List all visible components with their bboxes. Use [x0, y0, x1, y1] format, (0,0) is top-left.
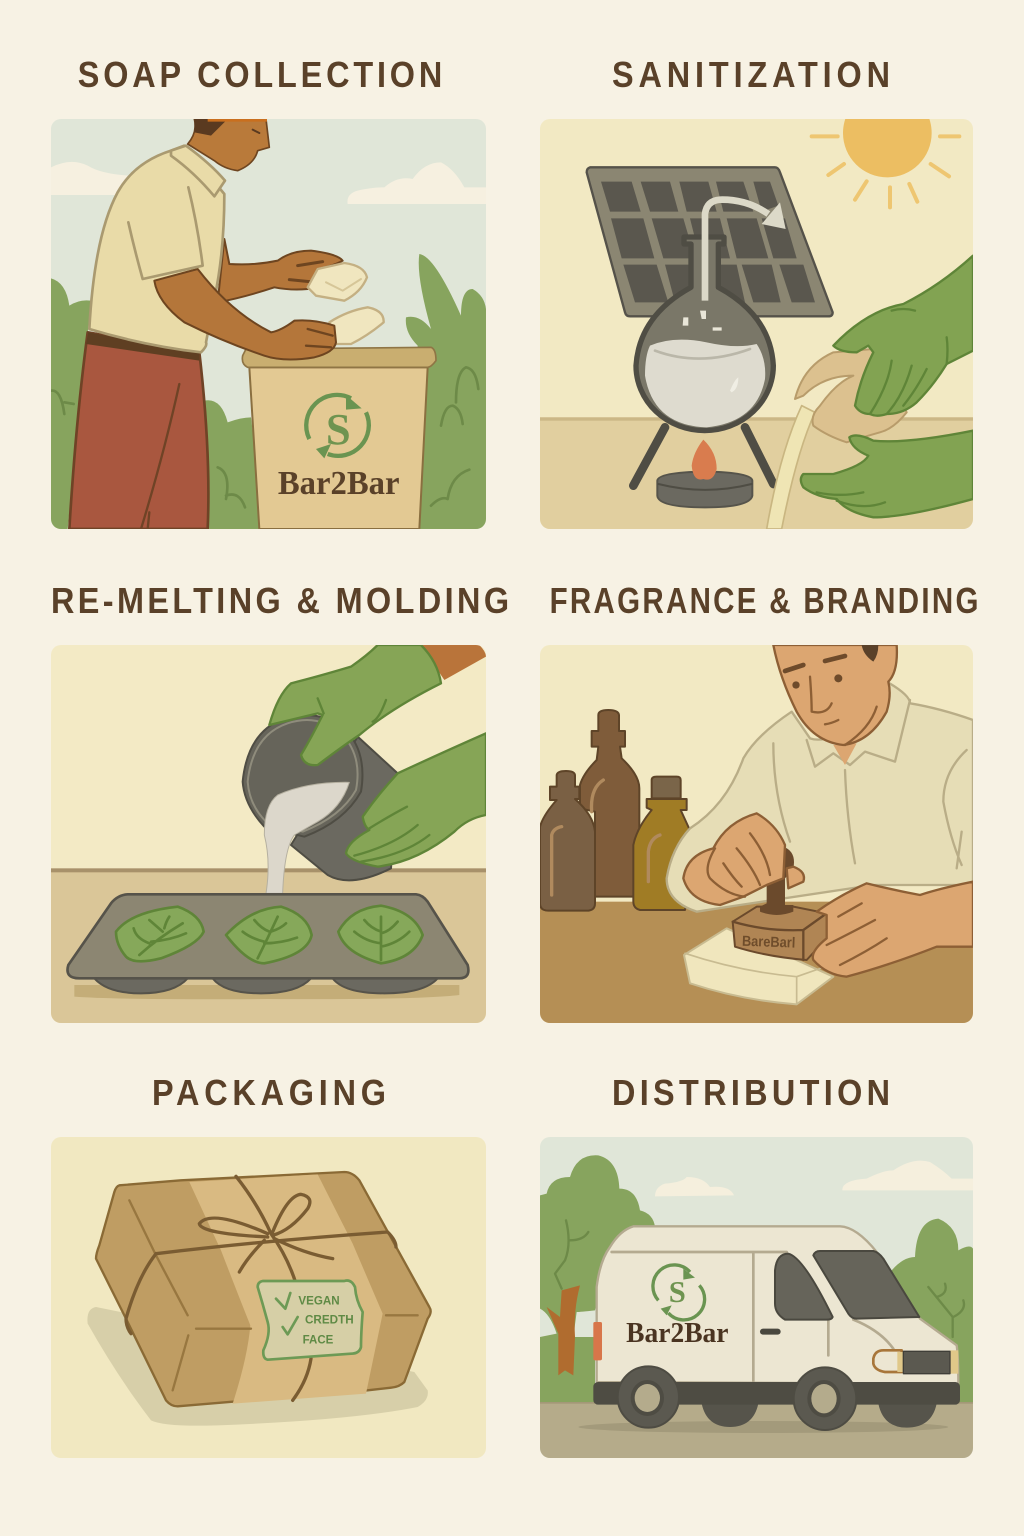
stand legs [633, 427, 773, 486]
road shadow [578, 1421, 948, 1433]
head [188, 119, 269, 171]
label [258, 1280, 363, 1360]
person [69, 119, 343, 529]
soap bar [684, 928, 833, 1004]
heading: sanitization: SANITIZATION [612, 55, 890, 95]
soap mold tray [67, 894, 468, 993]
vapour tube and arrow [705, 200, 786, 301]
burner and flame [657, 440, 752, 507]
poured soap stream [767, 406, 815, 529]
sun [810, 119, 962, 210]
cloth sack [795, 349, 907, 442]
van logo: Bar2Bar [626, 1317, 729, 1349]
van logo [626, 1265, 729, 1349]
trousers [69, 332, 208, 529]
heading: distribution: DISTRIBUTION [612, 1073, 890, 1113]
stamp: BareBarl [742, 934, 796, 952]
logo: Bar2Bar [278, 465, 400, 502]
heading: re-melting and molding: RE-MELTING & MOLDING [51, 581, 509, 621]
panel: distribution [540, 1137, 973, 1458]
back arm [218, 239, 343, 302]
stamp [733, 847, 827, 960]
label: CREDTH [305, 1313, 354, 1327]
shirt [89, 146, 224, 352]
panel: packaging [51, 1137, 486, 1458]
forearm [421, 645, 486, 680]
collar [171, 146, 225, 196]
sleeve [128, 187, 203, 279]
man's head [773, 645, 897, 765]
heading: fragrance and branding: FRAGRANCE & BRANDING [550, 580, 978, 621]
solar panel [587, 167, 833, 316]
parcel shadow [87, 1307, 428, 1426]
chassis and wheels [702, 1404, 937, 1428]
poured soap [264, 782, 349, 893]
bushes [51, 254, 486, 529]
melting pot [243, 715, 398, 880]
soap bars [308, 263, 384, 344]
gloved hands [801, 256, 973, 517]
man's shirt [667, 682, 973, 912]
fragrance bottles [540, 710, 697, 911]
van logo: S [669, 1275, 686, 1309]
flask [636, 237, 773, 431]
twine and bow [126, 1176, 396, 1400]
heading: soap collection: SOAP COLLECTION [78, 55, 442, 95]
clouds [51, 162, 486, 204]
panel: sanitization [540, 89, 973, 529]
panel: re-melting and molding [51, 645, 486, 1023]
label: VEGAN [298, 1294, 340, 1308]
logo [278, 395, 400, 502]
clouds [655, 1161, 973, 1196]
belt [86, 332, 199, 361]
trees [540, 1155, 973, 1402]
hands [683, 813, 973, 977]
panel: fragrance and branding [540, 645, 973, 1023]
van [593, 1226, 960, 1430]
van windows [775, 1251, 919, 1320]
heading: packaging: PACKAGING [152, 1073, 386, 1113]
front arm [154, 269, 336, 359]
tray shadow [74, 985, 459, 999]
logo: S [326, 404, 351, 454]
gloved hands [269, 645, 486, 867]
label: FACE [303, 1333, 333, 1347]
collection bin [242, 347, 436, 529]
panel: soap collection [51, 119, 486, 529]
parcel [96, 1172, 431, 1406]
